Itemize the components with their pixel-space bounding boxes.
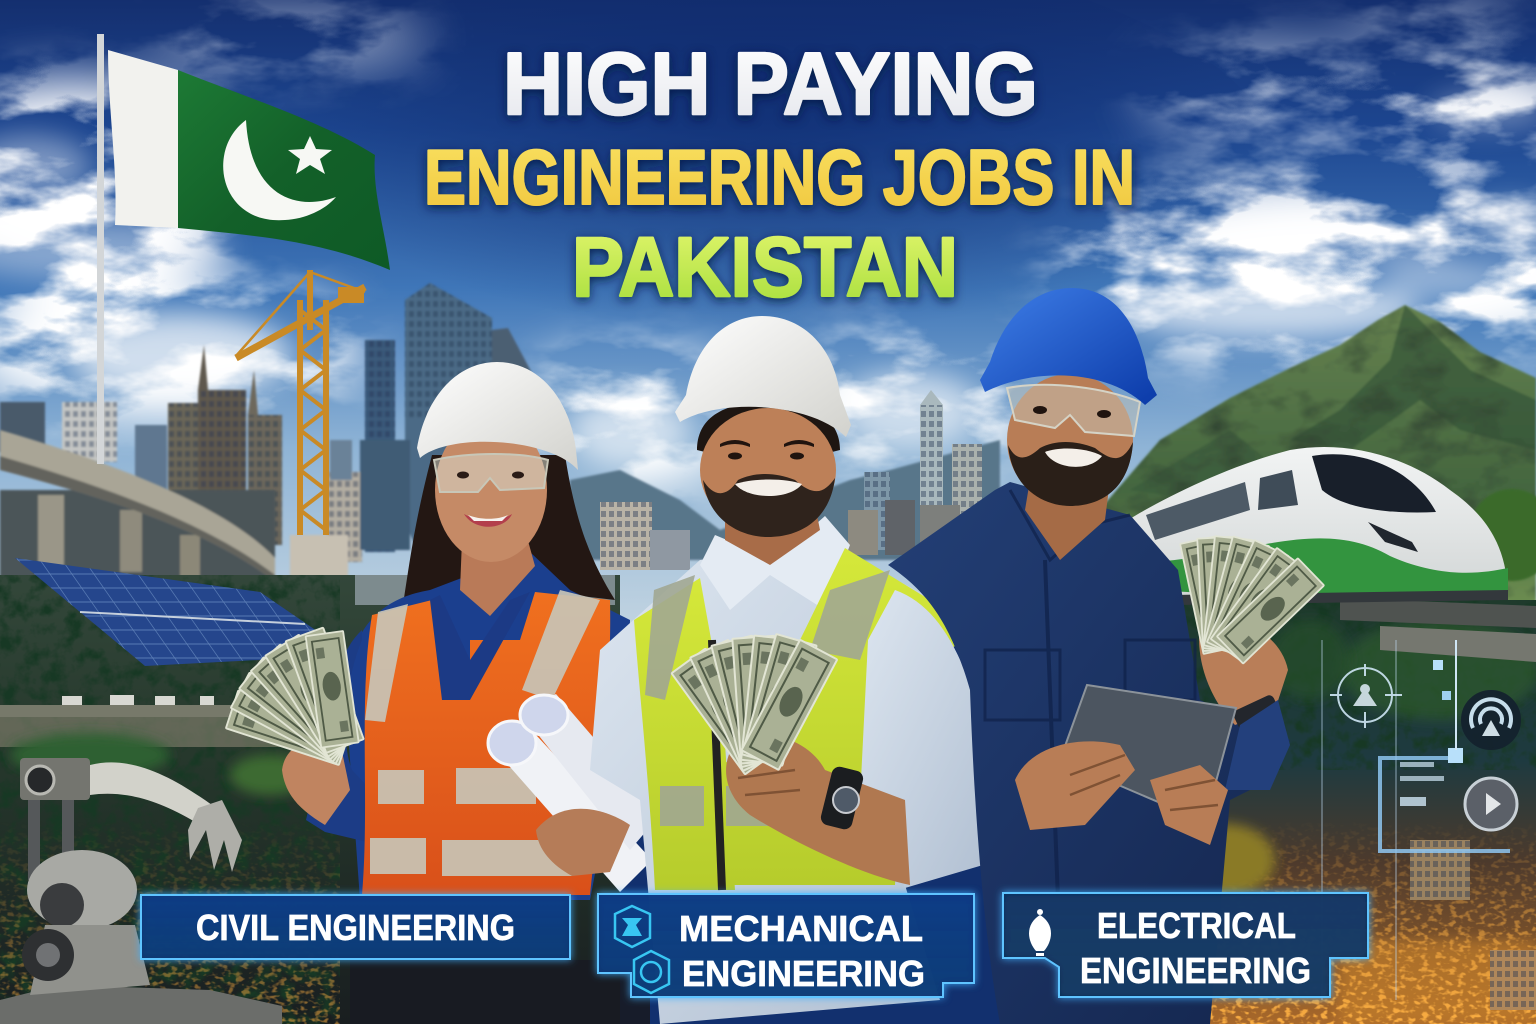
left sleeve [306, 630, 380, 845]
orange vest [362, 592, 610, 895]
collar [700, 516, 850, 610]
HUD ring icon: mountain target [1330, 664, 1402, 728]
robot arm [0, 758, 282, 1024]
parked cars row [62, 695, 214, 705]
label: mechanical engineering [598, 894, 974, 997]
hair [404, 455, 615, 600]
goggles [1007, 385, 1140, 436]
tablet [1060, 685, 1236, 822]
hand with money [282, 740, 350, 825]
eyes and brows [457, 472, 524, 478]
icon: light bulb [1029, 909, 1051, 956]
label: civil engineering [141, 895, 570, 959]
label: mechanical engineering: MECHANICAL [679, 908, 923, 949]
title [424, 34, 1135, 314]
engineer: right man [888, 288, 1290, 1024]
train viaduct and ground right [1175, 598, 1536, 1024]
forearm and hand [726, 736, 910, 885]
sky background [0, 0, 1536, 640]
crescent [223, 120, 336, 220]
distant mountains [570, 440, 1000, 560]
hand holding blueprints [536, 809, 630, 876]
watch [819, 765, 865, 831]
lower ground left [0, 575, 620, 1024]
face [435, 418, 547, 562]
rolled blueprints [488, 694, 660, 892]
label: electrical engineering [1003, 893, 1368, 997]
torso [888, 482, 1290, 1024]
chest pockets and collar [985, 490, 1195, 900]
big mountain [1095, 300, 1536, 610]
torso shirt [590, 545, 1000, 1024]
finger creases [735, 750, 800, 795]
face [700, 408, 836, 532]
bottom strip under panels [350, 960, 650, 1024]
title line 2: ENGINEERING JOBS IN [424, 133, 1135, 221]
finger creases on tablet hands [1070, 755, 1218, 810]
hands on tablet [1015, 741, 1135, 830]
HUD glowing frame [1380, 640, 1510, 851]
label: electrical engineering: ENGINEERING [1080, 950, 1311, 991]
highway overpass [0, 430, 275, 590]
icon: valve shield [615, 906, 650, 947]
green field [178, 70, 390, 270]
vest reflective strips [365, 590, 600, 876]
smile [1045, 449, 1102, 467]
engineer: center man [536, 316, 1002, 1024]
trees right of train [1468, 489, 1536, 581]
eyes [1033, 406, 1111, 418]
flagpole [97, 34, 104, 464]
eyes and brows [720, 440, 814, 460]
left skyline [0, 283, 533, 587]
smile [464, 514, 512, 527]
white helmet [675, 316, 851, 437]
high speed train [1112, 447, 1508, 606]
neck [1025, 480, 1110, 560]
beard [703, 474, 835, 537]
flag with pole [97, 34, 390, 464]
raised forearm [1199, 620, 1288, 725]
title line 1: HIGH PAYING [503, 34, 1038, 133]
star [288, 136, 332, 174]
hi-vis vest [634, 578, 735, 890]
textured clouds [0, 0, 1536, 503]
label: electrical engineering: ELECTRICAL [1097, 905, 1296, 946]
HUD ring icon: signal [1462, 691, 1520, 749]
goggles [434, 454, 548, 492]
white hoist band [108, 50, 178, 228]
face [1007, 374, 1133, 506]
white helmet [417, 362, 578, 470]
neck [725, 505, 820, 565]
soft cloud haze [0, 92, 1536, 468]
vest strips [645, 570, 890, 826]
smile [735, 480, 802, 496]
hair sides [697, 402, 840, 452]
HUD play ring [1465, 778, 1517, 830]
neck [460, 530, 535, 616]
torso with blue shirt [345, 552, 630, 900]
money fan: center [672, 634, 837, 774]
money fan: right [1180, 536, 1324, 664]
label: mechanical engineering: ENGINEERING [682, 953, 925, 994]
title line 3: PAKISTAN [572, 220, 958, 314]
center skyline [600, 390, 982, 570]
construction crane [236, 270, 365, 535]
money fan: woman [226, 628, 364, 765]
watch [1232, 694, 1280, 730]
solar panels [15, 558, 352, 666]
engineer: woman, left [282, 362, 630, 900]
right sleeve [860, 590, 1002, 888]
beard [1008, 442, 1133, 506]
sleeve right [1225, 700, 1290, 790]
HUD overlay [1322, 640, 1520, 1000]
icon: gear shield [634, 951, 669, 993]
blue helmet [980, 288, 1157, 405]
label: civil engineering: CIVIL ENGINEERING [196, 907, 515, 948]
